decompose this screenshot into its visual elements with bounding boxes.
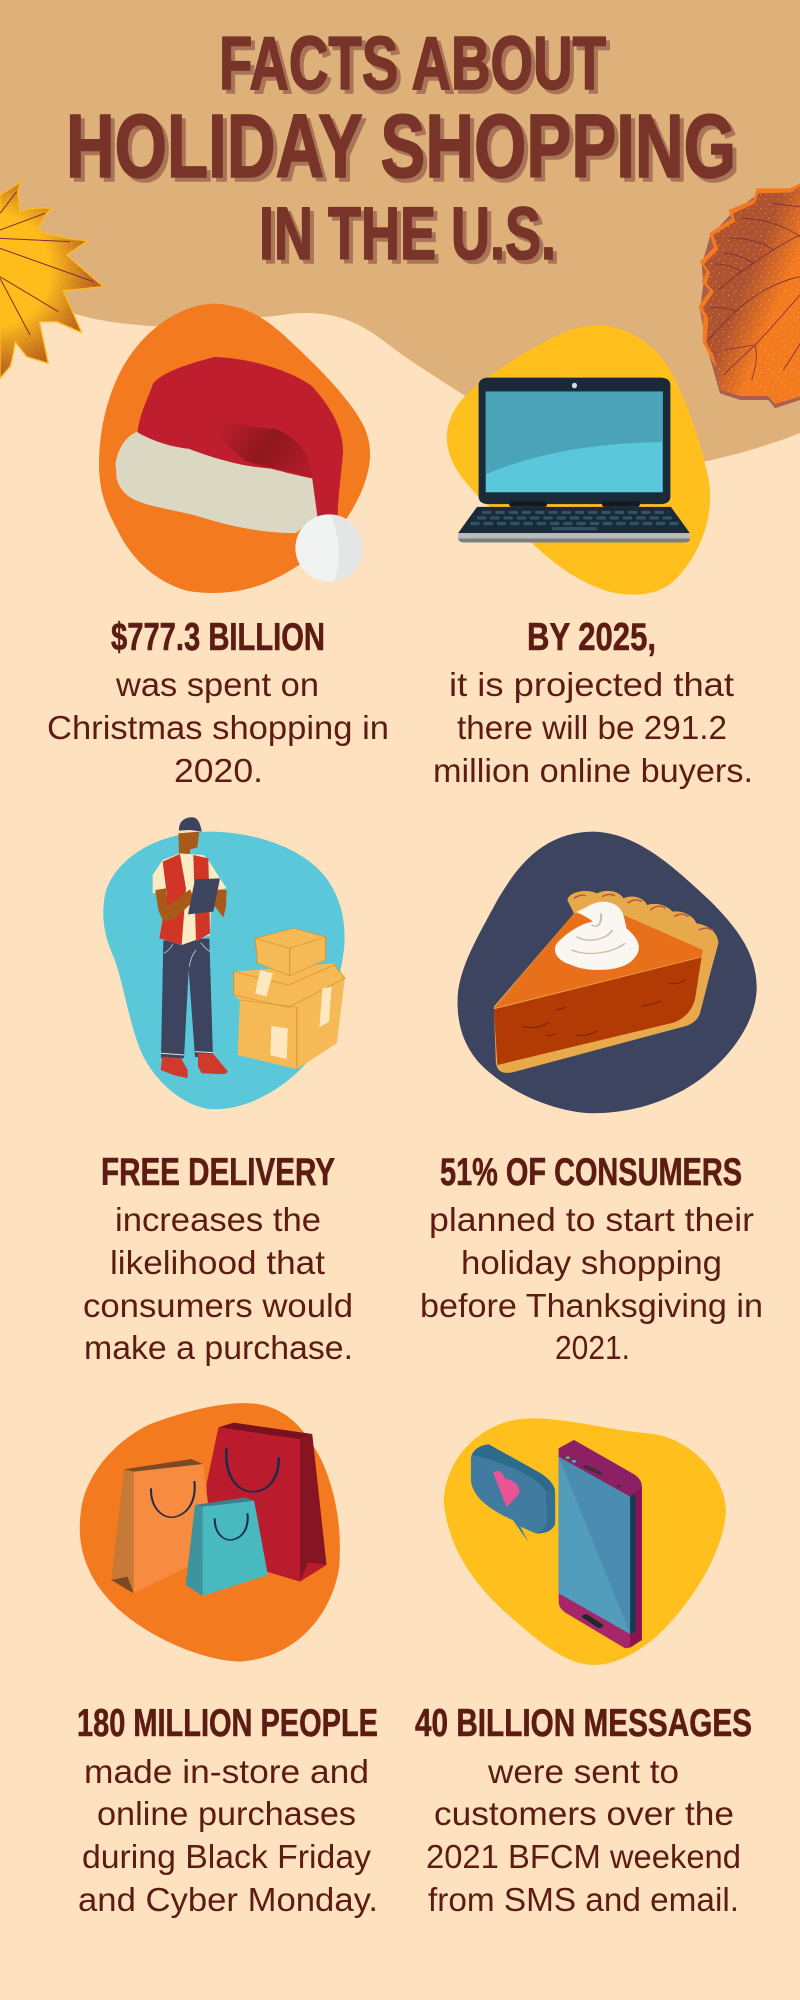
icon: shopping bags bbox=[111, 1423, 327, 1596]
icon: speech bubble with heart bbox=[471, 1444, 555, 1542]
description bbox=[78, 1753, 378, 1918]
description: increases the bbox=[115, 1201, 321, 1238]
description bbox=[426, 1753, 741, 1918]
heading: FREE DELIVERY bbox=[101, 1151, 335, 1194]
description: was spent on bbox=[115, 666, 319, 703]
card: by 2025 bbox=[433, 325, 753, 789]
description: 2020. bbox=[174, 752, 263, 789]
description: online purchases bbox=[97, 1795, 356, 1832]
header tan shape bbox=[0, 0, 800, 471]
description: Christmas shopping in bbox=[47, 709, 389, 746]
card: 51% of consumers bbox=[420, 832, 763, 1366]
description: holiday shopping bbox=[461, 1244, 722, 1281]
title bbox=[66, 21, 736, 275]
navy blob bbox=[458, 832, 757, 1113]
orange blob bbox=[80, 1403, 340, 1662]
blue blob bbox=[103, 832, 345, 1109]
description: consumers would bbox=[83, 1287, 353, 1324]
description bbox=[420, 1201, 763, 1366]
icon: yellow autumn leaf bbox=[0, 178, 103, 378]
icon: delivery person bbox=[153, 817, 228, 1078]
orange blob bbox=[99, 304, 370, 593]
description: and Cyber Monday. bbox=[78, 1881, 378, 1918]
icon: santa hat bbox=[116, 357, 363, 582]
description: during Black Friday bbox=[82, 1838, 372, 1875]
title: IN THE U.S. bbox=[259, 192, 556, 275]
description bbox=[47, 666, 389, 789]
description: likelihood that bbox=[110, 1244, 325, 1281]
icon: pumpkin pie slice bbox=[494, 891, 718, 1073]
heading: 180 MILLION PEOPLE bbox=[77, 1702, 378, 1745]
card: $777.3 billion bbox=[47, 304, 389, 789]
description: 2021. bbox=[555, 1329, 630, 1366]
description: made in-store and bbox=[84, 1753, 369, 1790]
heading: BY 2025, bbox=[527, 616, 656, 659]
title: FACTS ABOUT bbox=[219, 21, 606, 105]
card: free delivery bbox=[83, 817, 353, 1366]
card: 180 million people bbox=[77, 1403, 378, 1918]
icon: smartphone bbox=[559, 1440, 642, 1648]
description: were sent to bbox=[487, 1753, 679, 1790]
description bbox=[83, 1201, 353, 1366]
description: there will be 291.2 bbox=[457, 709, 727, 746]
icon: orange autumn leaf bbox=[698, 183, 800, 408]
description: customers over the bbox=[434, 1795, 734, 1832]
description: it is projected that bbox=[449, 666, 734, 703]
description: million online buyers. bbox=[433, 752, 753, 789]
description: 2021 BFCM weekend bbox=[426, 1838, 741, 1875]
description: before Thanksgiving in bbox=[420, 1287, 763, 1324]
icon: laptop bbox=[458, 378, 690, 542]
yellow blob bbox=[444, 1418, 726, 1665]
description bbox=[433, 666, 753, 789]
card: 40 billion messages bbox=[415, 1418, 752, 1918]
icon: stacked boxes bbox=[234, 928, 345, 1069]
description: planned to start their bbox=[429, 1201, 754, 1238]
description: make a purchase. bbox=[84, 1329, 353, 1366]
heading: $777.3 BILLION bbox=[111, 616, 325, 659]
description: from SMS and email. bbox=[428, 1881, 739, 1918]
yellow blob bbox=[447, 325, 710, 595]
